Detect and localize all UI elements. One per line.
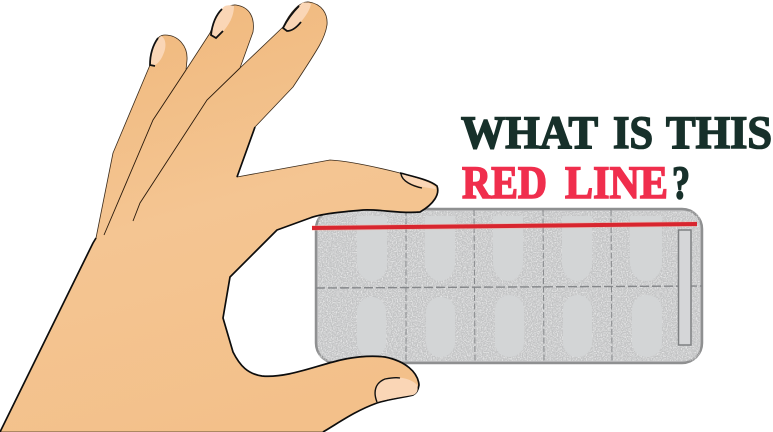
foil card — [316, 209, 702, 363]
nail: ring finger — [211, 5, 234, 38]
title line 2: LINE — [565, 157, 668, 209]
title line 1: IS — [613, 107, 653, 159]
blister pack — [316, 209, 702, 363]
red line — [312, 224, 697, 228]
question mark: ? — [672, 157, 690, 209]
hand — [0, 2, 438, 432]
pills top row — [357, 216, 662, 281]
title line 1: WHAT — [461, 107, 598, 159]
side strip — [678, 230, 691, 345]
title line 2 — [462, 157, 668, 209]
hand silhouette — [0, 2, 438, 432]
nail: index finger — [401, 174, 436, 189]
nail: middle finger — [283, 2, 311, 31]
heavy contour: palm and thumb — [0, 127, 438, 432]
nail: pinky — [150, 36, 165, 66]
title line 2: RED — [462, 157, 547, 209]
title line 1 — [461, 107, 772, 159]
nail: thumb — [375, 377, 418, 402]
pills bottom row — [357, 295, 662, 357]
title — [461, 107, 772, 209]
perforation lines — [316, 210, 702, 362]
finger crease lines — [104, 68, 240, 235]
